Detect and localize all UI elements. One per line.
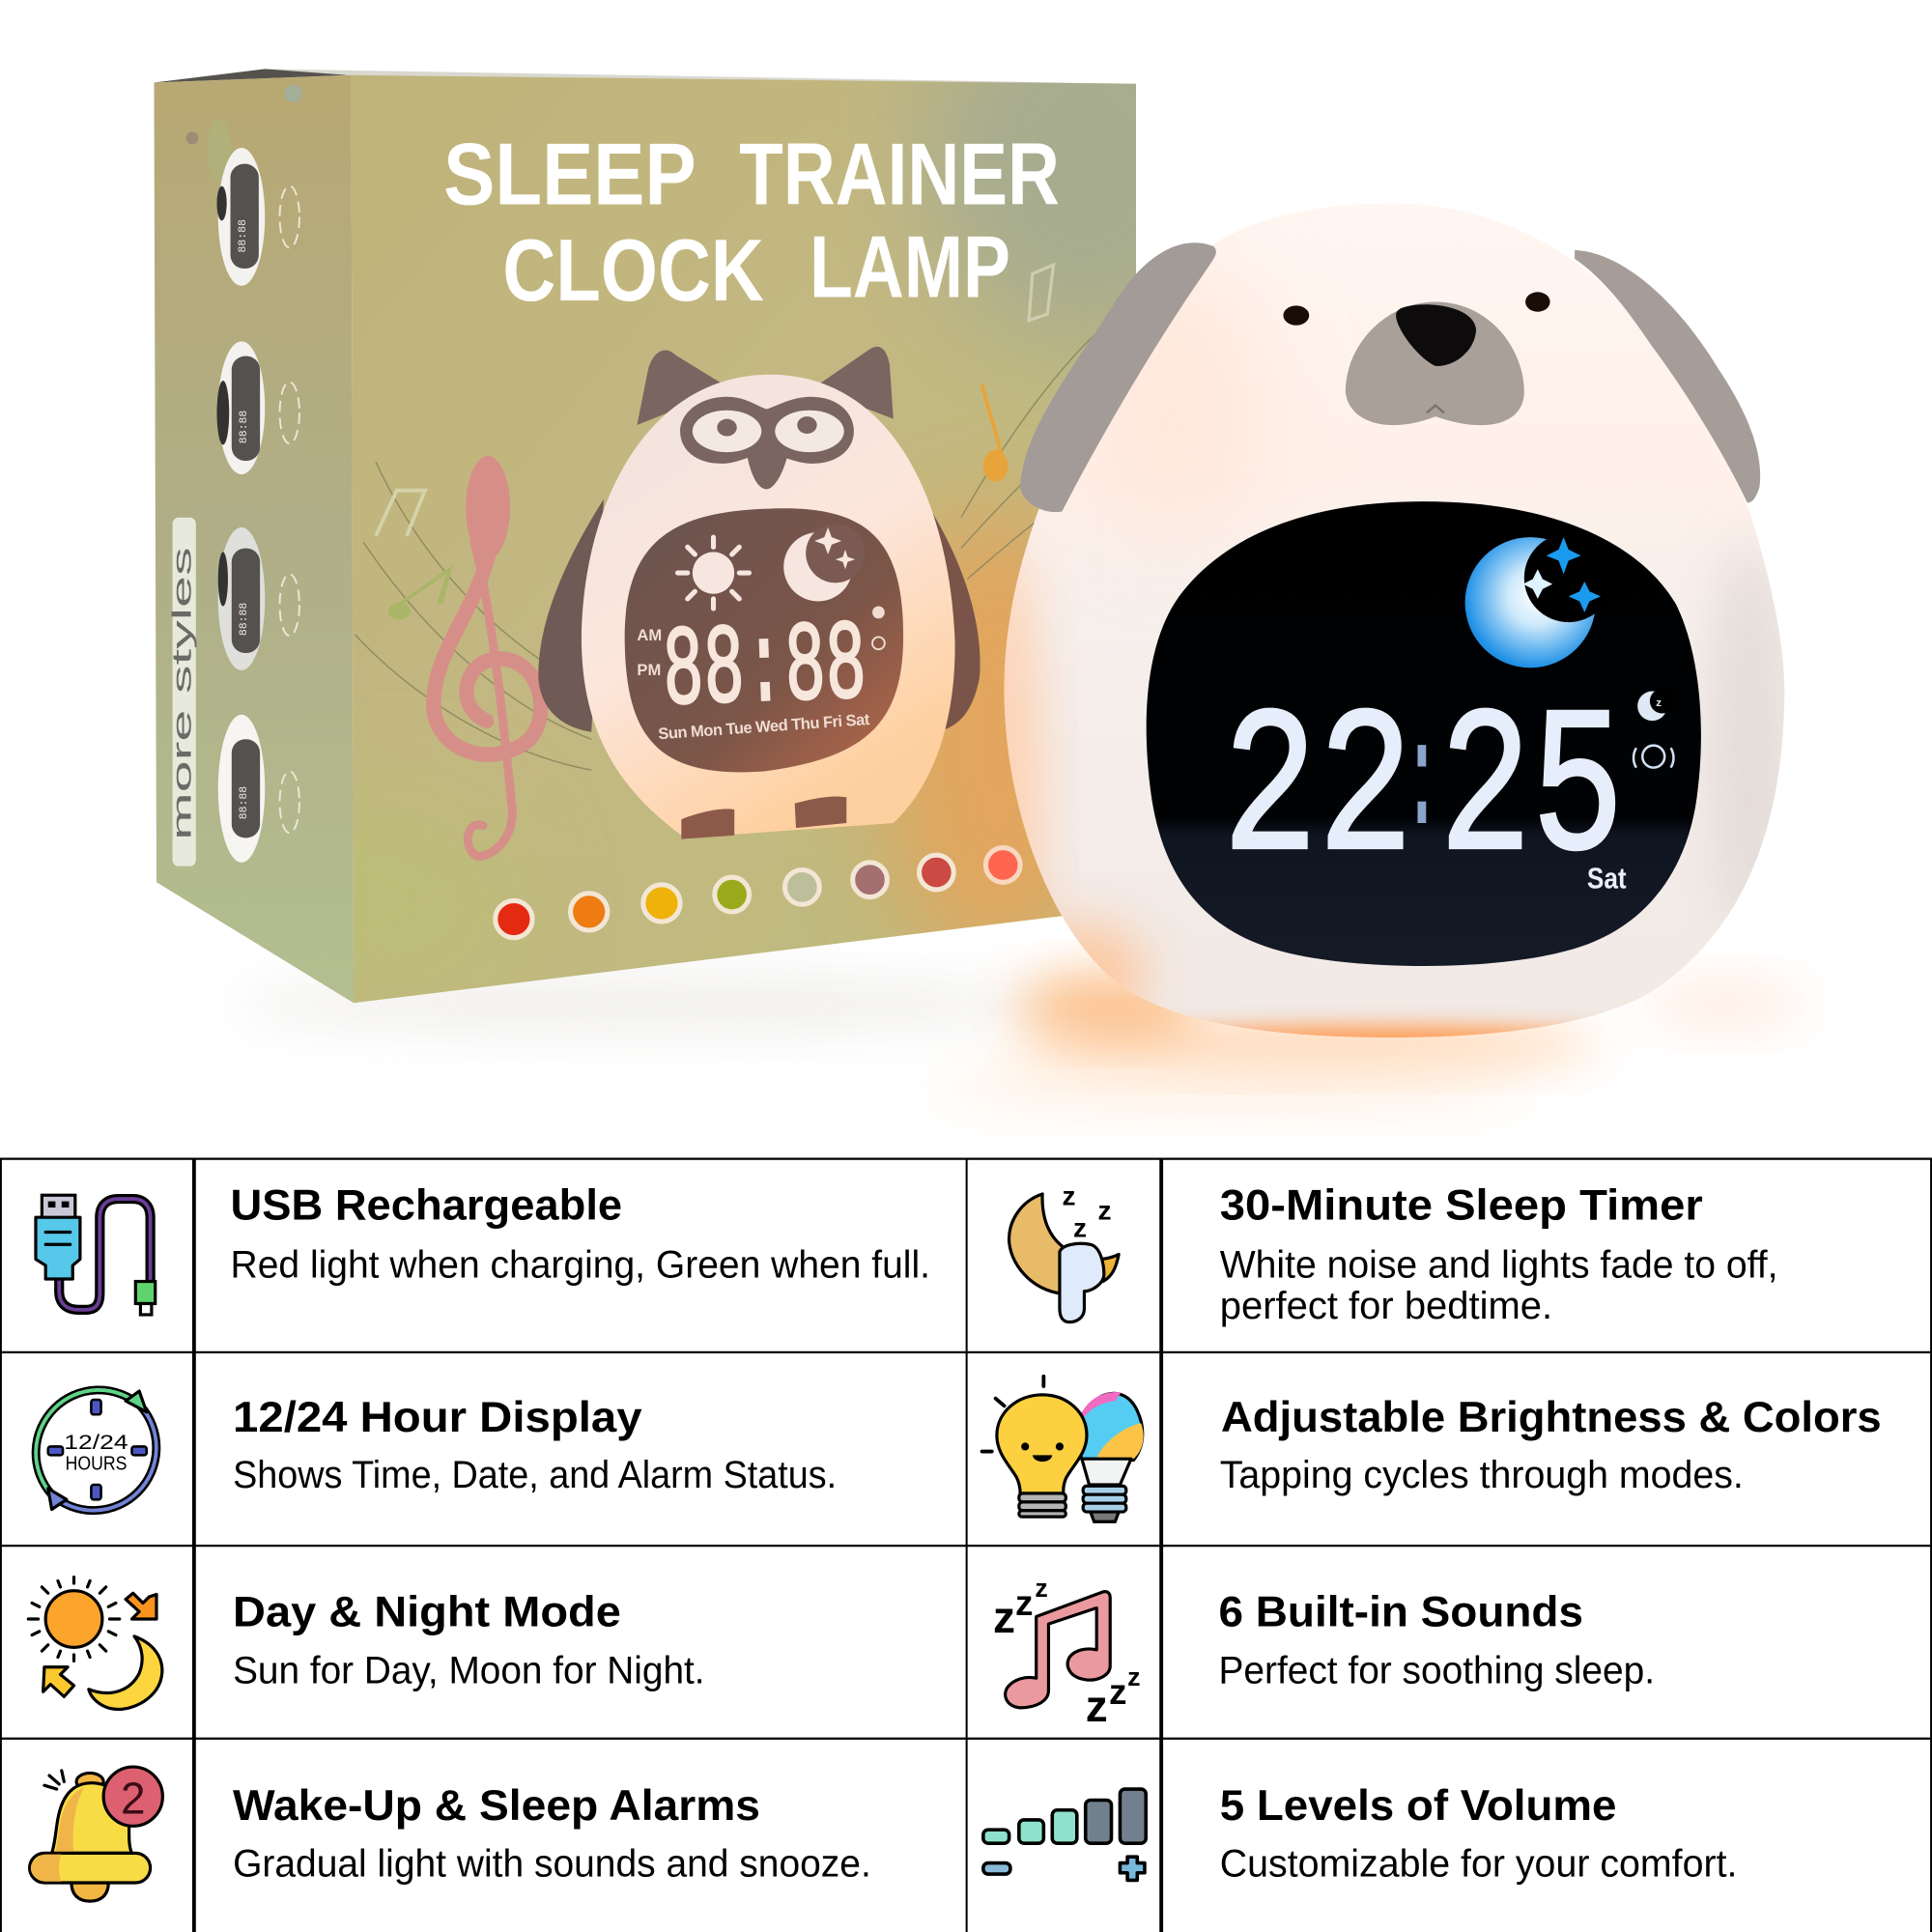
feature: Day & Night Mode — [28, 1577, 705, 1709]
box title — [443, 127, 1060, 320]
pale note upper right — [1029, 265, 1054, 321]
heading: 5 Levels of Volume — [1220, 1782, 1616, 1830]
description: Perfect for soothing sleep. — [1218, 1649, 1655, 1691]
sleep status icon: z — [1656, 697, 1662, 709]
owl mask — [680, 397, 854, 489]
green note — [397, 569, 450, 607]
sleep status icon — [1637, 689, 1674, 721]
mini clock 2 — [216, 341, 265, 474]
icon: sleeping moon: z — [1073, 1213, 1087, 1243]
treble clef — [434, 456, 541, 856]
clock time: 22 — [1222, 677, 1413, 911]
display screen — [1147, 501, 1701, 966]
mini clock 4: 88:88 — [238, 786, 250, 819]
green note head — [388, 603, 411, 620]
icon: volume levels — [983, 1789, 1146, 1880]
description: Tapping cycles through modes. — [1220, 1454, 1744, 1496]
owl body — [582, 375, 955, 838]
description: Sun for Day, Moon for Night. — [233, 1649, 705, 1691]
box side face — [154, 75, 354, 1003]
icon: music note with zzz: z — [1109, 1672, 1126, 1712]
decorative dots — [186, 131, 198, 144]
more styles tag: more styles — [167, 547, 197, 840]
icon: music note with zzz: z — [993, 1592, 1015, 1642]
table grid — [0, 1158, 1932, 1932]
dashed outlines — [280, 186, 299, 833]
feature table — [0, 1158, 1932, 1932]
AM label: AM — [637, 626, 662, 644]
icon: alarm bell: 2 — [121, 1774, 146, 1824]
snout — [1346, 301, 1524, 425]
feature: 30-Minute Sleep Timer — [1009, 1180, 1778, 1327]
heading: USB Rechargeable — [231, 1182, 622, 1230]
description: Gradual light with sounds and snooze. — [233, 1843, 871, 1886]
orange note — [982, 384, 1003, 466]
mouth notch — [1427, 406, 1444, 412]
feature: 6 Built-in Sounds — [993, 1574, 1655, 1731]
box title: CLOCK — [502, 222, 764, 320]
owl wings — [538, 499, 604, 732]
icon: music note with zzz: z — [1086, 1681, 1108, 1731]
left eye — [1283, 305, 1309, 326]
lamp body — [1005, 203, 1784, 1037]
mini clock 2: 88:88 — [238, 411, 250, 443]
colour dots — [496, 848, 1020, 938]
feature: Adjustable Brightness & Colors — [982, 1377, 1882, 1521]
mini clock 3: 88:88 — [238, 603, 250, 636]
sun glyph — [678, 537, 750, 609]
description: Red light when charging, Green when full. — [231, 1244, 930, 1287]
feature: Wake-Up & Sleep Alarms — [30, 1767, 871, 1901]
PM label: PM — [637, 661, 661, 679]
right eye — [1525, 292, 1550, 312]
description line 2: perfect for bedtime. — [1220, 1285, 1552, 1327]
icon: 12/24 hours clock: HOURS — [66, 1454, 127, 1475]
heading: 12/24 Hour Display — [233, 1394, 642, 1441]
side panel miniatures — [167, 85, 301, 867]
heading: Day & Night Mode — [233, 1589, 621, 1636]
mini clock 1 — [216, 148, 265, 286]
music staves — [355, 301, 1140, 770]
feature: 5 Levels of Volume — [983, 1782, 1737, 1886]
box title: TRAINER — [739, 127, 1060, 224]
description: Customizable for your comfort. — [1220, 1843, 1737, 1886]
description: Shows Time, Date, and Alarm Status. — [233, 1454, 837, 1496]
owl ears — [637, 351, 729, 425]
icon: sun and moon swap — [28, 1577, 162, 1709]
more styles tag — [167, 518, 197, 867]
box top edge — [154, 69, 1136, 84]
small moon icon — [872, 607, 885, 618]
owl feet — [681, 809, 734, 839]
floor shadow and lamp glow — [234, 972, 1805, 1112]
icon: sleeping moon: z — [1062, 1180, 1076, 1210]
mini clock 1: 88:88 — [237, 219, 249, 252]
gift box — [154, 69, 1136, 1003]
icon: music note with zzz: z — [1127, 1662, 1140, 1691]
weekday label: Sat — [1587, 863, 1627, 895]
moon glyph — [783, 524, 865, 601]
orange note head — [983, 450, 1008, 482]
box front face — [352, 75, 1136, 1003]
icon: music note with zzz: z — [1035, 1574, 1048, 1603]
icon: music note with zzz: z — [1015, 1583, 1034, 1623]
box title: SLEEP — [443, 127, 696, 224]
alarm status icon — [1634, 746, 1673, 768]
pale note — [376, 491, 425, 536]
owl screen — [625, 508, 903, 772]
right ear — [1575, 250, 1760, 502]
owl clock illustration — [538, 347, 980, 839]
icon: alarm bell — [30, 1767, 162, 1901]
heading: 30-Minute Sleep Timer — [1220, 1182, 1703, 1230]
feature: USB Rechargeable — [36, 1182, 930, 1315]
icon: music note with zzz — [993, 1574, 1140, 1731]
face lighting — [222, 0, 1244, 1010]
icon: 12/24 hours clock: 12/24 — [64, 1430, 128, 1454]
lamp shading — [967, 259, 1786, 1074]
heading: 6 Built-in Sounds — [1218, 1589, 1583, 1636]
left ear — [1020, 242, 1216, 512]
clock time: 25 — [1439, 677, 1624, 911]
mini clock 4 — [218, 715, 265, 863]
dog sleep trainer lamp — [967, 203, 1786, 1074]
box title: LAMP — [810, 218, 1010, 316]
nose — [1396, 304, 1476, 366]
icon: sleeping moon: z — [1097, 1196, 1112, 1226]
weekdays: Sun Mon Tue Wed Thu Fri Sat — [658, 710, 870, 743]
description: White noise and lights fade to off, — [1220, 1244, 1778, 1287]
icon: light bulbs — [982, 1377, 1144, 1521]
icon: 12/24 hours clock — [35, 1389, 157, 1512]
feature: 12/24 Hour Display — [35, 1389, 837, 1512]
clock time: : — [1400, 700, 1444, 867]
clock time — [1222, 677, 1624, 911]
moon and stars — [1465, 533, 1613, 668]
heading: Adjustable Brightness & Colors — [1221, 1394, 1882, 1441]
product photo — [154, 0, 1805, 1112]
small alarm icon — [872, 637, 885, 649]
heading: Wake-Up & Sleep Alarms — [233, 1782, 760, 1830]
icon: sleeping moon — [1009, 1180, 1119, 1322]
icon: usb cable — [36, 1195, 156, 1315]
mini clock 3 — [218, 527, 265, 670]
owl screen digits: 88:88 — [661, 603, 868, 738]
